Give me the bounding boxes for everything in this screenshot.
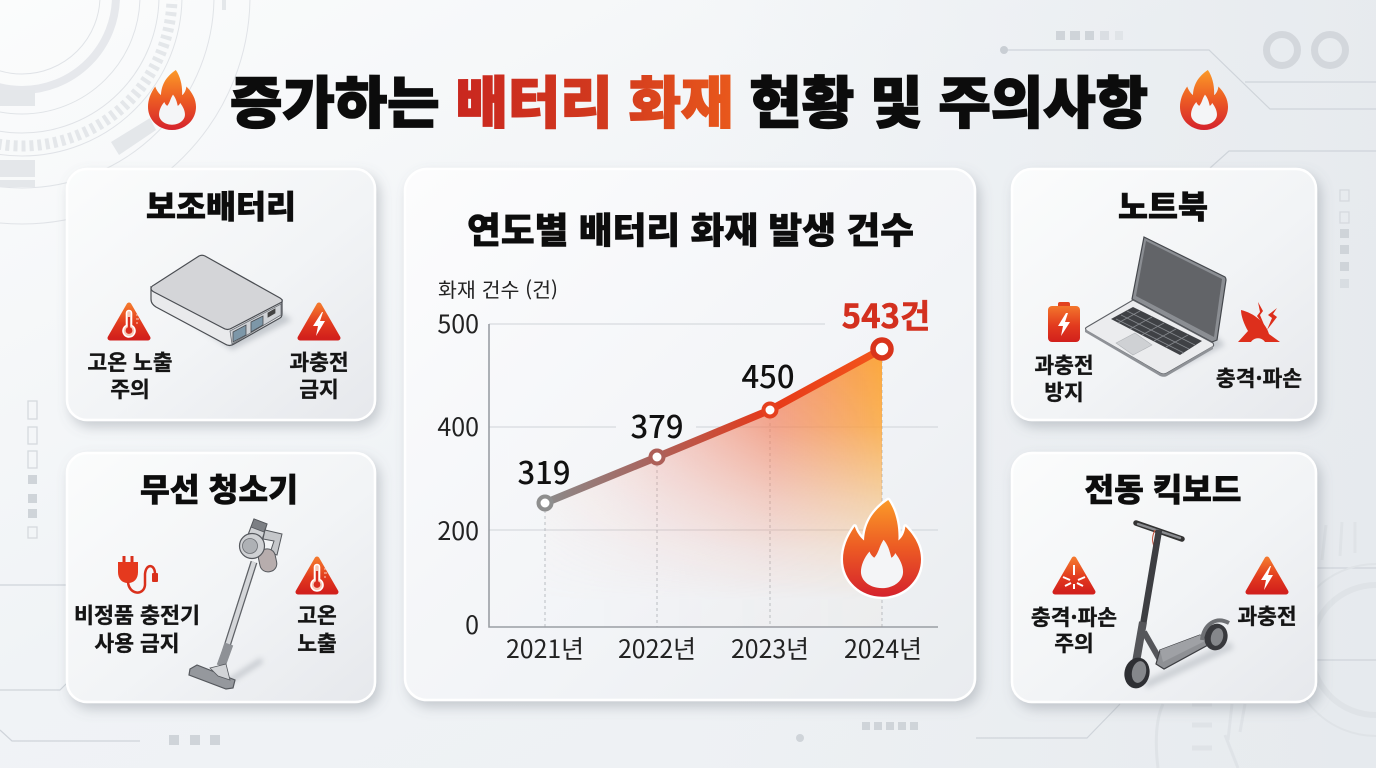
panel: yearly battery fire chart bbox=[405, 169, 975, 700]
axis title: 화재 건수 (건) bbox=[438, 274, 558, 303]
label: non-genuine charger: 비정품 충전기 bbox=[74, 599, 200, 630]
label: impact warning bbox=[1031, 601, 1117, 658]
y axis labels: 200 bbox=[437, 512, 479, 548]
label: impact warning: 주의 bbox=[1054, 627, 1094, 658]
icon: kickboard bbox=[1122, 523, 1232, 691]
x axis labels: 2021년 bbox=[506, 630, 584, 666]
icon: right flame bbox=[1180, 70, 1228, 130]
icon: heat warning bbox=[110, 305, 148, 338]
title text: 증가하는 배터리 화재 현황 및 주의사항 bbox=[230, 59, 1148, 140]
gridlines bbox=[489, 324, 938, 530]
icon: impact damage bbox=[1238, 302, 1280, 342]
line chart bbox=[437, 290, 938, 666]
label: overcharge: 과충전 bbox=[289, 346, 349, 377]
heading: 노트북 bbox=[1118, 182, 1208, 228]
x axis labels bbox=[506, 630, 922, 666]
x axis labels: 2022년 bbox=[618, 630, 696, 666]
label: heat: 노출 bbox=[297, 627, 337, 658]
panel: cordless vacuum bbox=[67, 453, 375, 702]
area bbox=[570, 358, 882, 591]
label: heat bbox=[297, 599, 337, 658]
label: impact damage: 충격·파손 bbox=[1216, 362, 1302, 393]
label: overcharge prevention: 과충전 bbox=[1034, 349, 1094, 380]
icon: laptop bbox=[1085, 237, 1226, 377]
background pattern: bits bbox=[1000, 46, 1008, 54]
icon: chart flame bbox=[843, 500, 921, 597]
value labels: 450 bbox=[741, 352, 795, 397]
label: non-genuine charger: 사용 금지 bbox=[94, 627, 180, 658]
icon: vacuum bbox=[189, 519, 282, 689]
highlighted value: 543건 bbox=[842, 290, 930, 338]
panel: electric kickboard bbox=[1012, 453, 1316, 702]
value labels: 379 bbox=[630, 402, 684, 447]
label: overcharge: 과충전 bbox=[1237, 600, 1297, 631]
icon: impact warning bbox=[1055, 559, 1093, 592]
icon: heat warning bbox=[298, 559, 336, 592]
label: heat: 고온 bbox=[297, 599, 337, 630]
trend line bbox=[545, 349, 882, 503]
heading: 보조배터리 bbox=[146, 182, 296, 228]
icon: plug bbox=[118, 556, 158, 593]
label: overcharge bbox=[289, 346, 349, 404]
label: heat bbox=[87, 346, 173, 404]
icon: overcharge warning bbox=[300, 305, 338, 338]
heading: 전동 킥보드 bbox=[1084, 465, 1242, 511]
y axis labels: 400 bbox=[437, 408, 479, 444]
label: overcharge: 금지 bbox=[299, 373, 339, 404]
y axis labels: 500 bbox=[437, 305, 479, 341]
icon: overcharge warning bbox=[1248, 559, 1286, 592]
x axis labels: 2023년 bbox=[731, 630, 809, 666]
label: overcharge prevention bbox=[1034, 349, 1094, 407]
axes bbox=[489, 324, 938, 627]
y axis labels: 0 bbox=[465, 606, 479, 642]
heading: 무선 청소기 bbox=[140, 465, 298, 511]
data points bbox=[538, 496, 552, 510]
icon: power bank bbox=[151, 255, 292, 350]
panel: power bank bbox=[67, 169, 375, 420]
label: heat: 주의 bbox=[110, 373, 150, 404]
title bbox=[148, 59, 1228, 140]
label: heat: 고온 노출 bbox=[87, 346, 173, 377]
label: non-genuine charger bbox=[74, 599, 200, 658]
value labels: 319 bbox=[517, 448, 571, 493]
value labels bbox=[517, 352, 795, 493]
panel: laptop bbox=[1012, 169, 1316, 420]
heading: 연도별 배터리 화재 발생 건수 bbox=[467, 202, 914, 254]
y axis labels bbox=[437, 305, 479, 642]
x axis labels: 2024년 bbox=[844, 630, 922, 666]
label: overcharge prevention: 방지 bbox=[1044, 376, 1084, 407]
icon: battery bbox=[1048, 302, 1080, 342]
icon: left flame bbox=[148, 70, 196, 130]
background pattern: lower-right rings bbox=[1156, 522, 1376, 768]
label: impact warning: 충격·파손 bbox=[1031, 601, 1117, 632]
background pattern: top-left rings bbox=[0, 0, 250, 224]
